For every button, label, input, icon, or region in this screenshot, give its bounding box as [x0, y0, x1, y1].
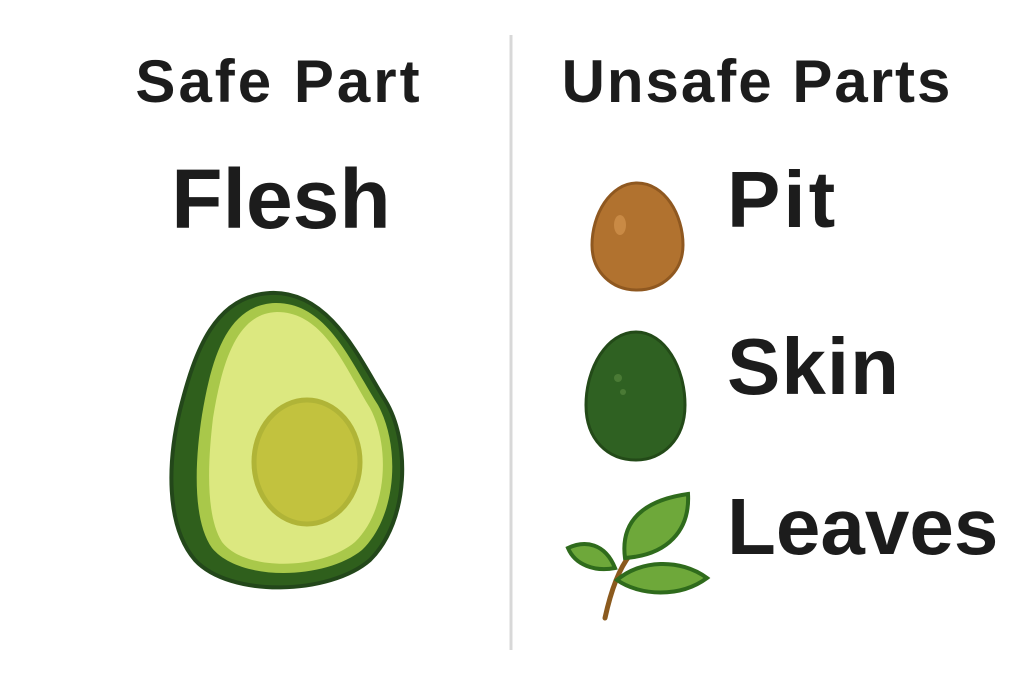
label: Pit: Pit — [727, 155, 838, 244]
icon: skin — [586, 332, 685, 460]
icon: leaves — [568, 494, 707, 618]
icon: pit — [592, 183, 683, 290]
icon: avocado half — [171, 293, 402, 587]
label: Leaves: Leaves — [727, 482, 998, 571]
label: Skin: Skin — [727, 322, 900, 411]
label: Flesh: Flesh — [171, 152, 391, 246]
heading: Unsafe Parts: Unsafe Parts — [562, 48, 952, 115]
heading: Safe Part: Safe Part — [135, 48, 423, 115]
